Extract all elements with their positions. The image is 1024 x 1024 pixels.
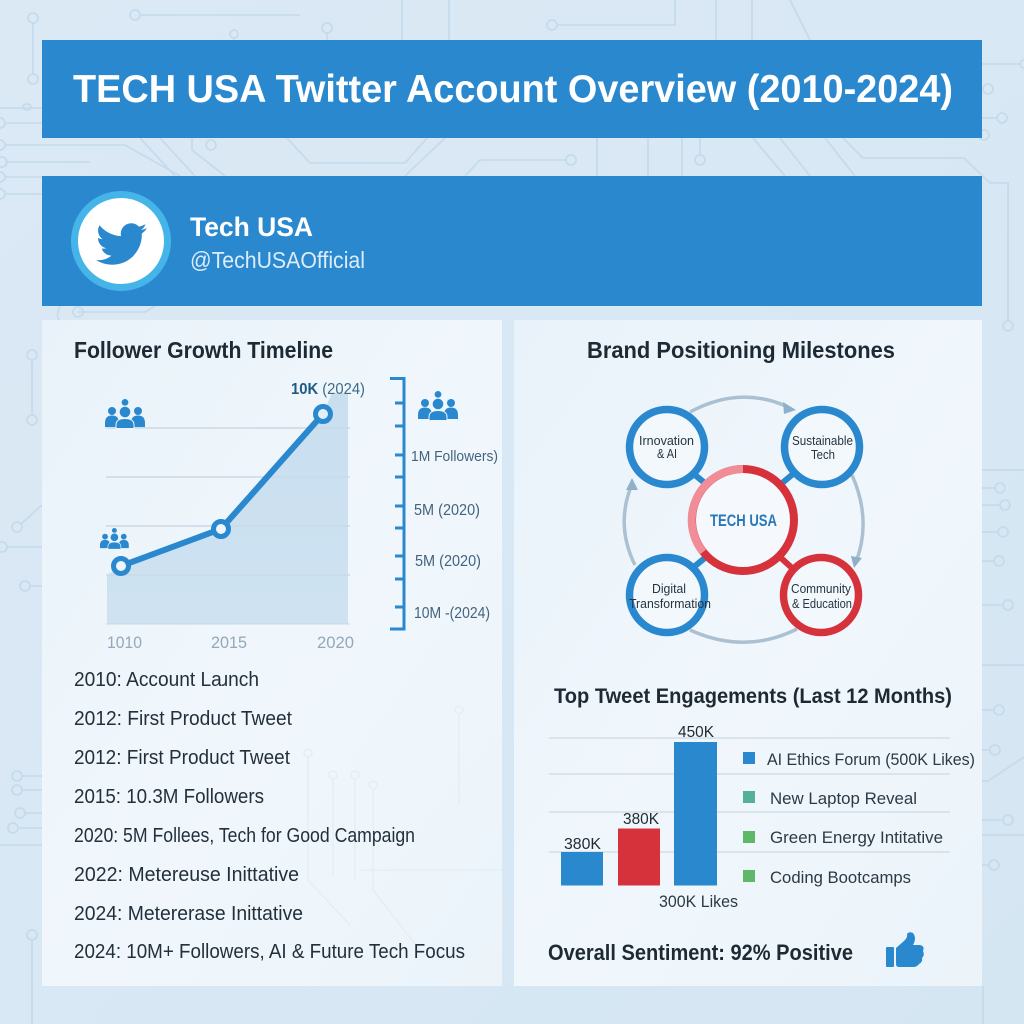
node: digital transformation: Digital [652,581,686,596]
bar chart: tweet engagement: 450K [678,724,714,741]
node: community and education [784,558,858,632]
heading: follower growth timeline: Follower Growth Timeline [74,337,333,363]
milestones list: 2012: First Product Tweet [74,708,292,730]
follower scale bracket: 10M -(2024) [414,605,490,622]
node: sustainable tech: Sustainable [792,433,853,448]
node: community and education: Community [791,581,851,596]
node: sustainable tech [784,410,860,484]
milestones list: 2020: 5M Follees, Tech for Good Campaign [74,825,415,847]
milestones list: 2012: First Product Tweet [74,747,290,769]
follower scale bracket [390,378,498,629]
chart legend: AI Ethics Forum (500K Likes) [767,750,975,769]
line chart: follower growth: 1010 [107,633,142,652]
line chart: follower growth: 2015 [211,633,247,652]
bar chart: tweet engagement: 380K [564,836,601,853]
account name: Tech USA [190,212,313,242]
icon: thumbs up [886,932,924,967]
milestones list: 2015: 10.3M Followers [74,786,264,808]
heading: top tweet engagements: Top Tweet Engagements (Last 12 Months) [554,685,952,708]
milestones list: 2010: Account Laɹnch [74,669,259,691]
node: innovation and AI: Irnovation [639,433,694,448]
icon: followers group large [105,399,145,428]
node: center TECH USA [692,469,794,571]
panel: follower growth [42,320,502,986]
node: digital transformation [629,558,711,632]
node: center TECH USA: TECH USA [710,511,777,530]
node: innovation and AI [630,410,704,484]
faint circuit traces [304,706,502,950]
node: digital transformation: Transformation [629,596,711,611]
bar chart: tweet engagement: 300K Likes [659,893,738,911]
title banner [42,40,982,138]
title banner: TECH USA Twitter Account Overview (2010-2024) [73,68,953,111]
milestones list: 2024: Metererase Inittative [74,903,303,925]
follower scale bracket: 5M (2020) [414,502,480,519]
follower scale bracket: 1M Followers) [411,448,498,465]
milestones list [74,669,465,963]
chart legend: New Laptop Reveal [770,789,917,808]
heading: brand positioning milestones: Brand Positioning Milestones [587,337,895,363]
panel: brand and engagement [514,320,982,986]
node: sustainable tech: Tech [811,447,835,462]
line chart: follower growth [106,381,365,652]
bar chart: tweet engagement [549,724,950,911]
bar chart: tweet engagement: 380K [623,811,659,828]
chart legend: Coding Bootcamps [770,868,911,887]
node: community and education: & Education [792,596,852,611]
node: innovation and AI: & AI [657,446,677,461]
line chart: follower growth: 10K (2024) [291,381,365,398]
milestones list: 2024: 10M+ Followers, AI & Future Tech Focus [74,941,465,963]
milestones list: 2022: Metereuse Inittative [74,864,299,886]
chart legend [743,750,975,887]
profile header [42,176,982,306]
icon: followers group small [100,528,129,549]
cycle diagram: brand pillars [624,397,863,642]
icon: followers group right [418,391,458,420]
chart legend: Green Energy Intitative [770,828,943,847]
sentiment summary: Overall Sentiment: 92% Positive [548,940,853,965]
account handle: @TechUSAOfficial [190,247,365,273]
line chart: follower growth: 2020 [317,633,354,652]
follower scale bracket: 5M (2020) [415,553,481,570]
icon: twitter bird avatar [74,194,168,288]
